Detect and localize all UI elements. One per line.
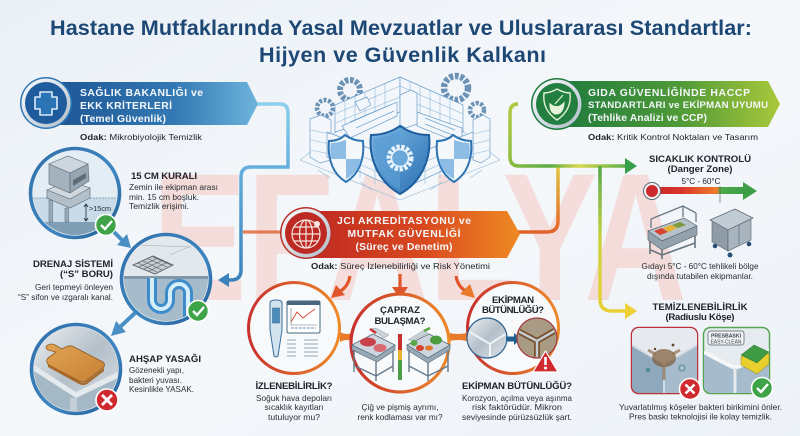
text: drain system: DRENAJ SİSTEMİ <box>33 259 113 270</box>
data table <box>287 340 318 356</box>
thermometer bar <box>644 182 757 203</box>
icon: medical cross <box>20 77 72 129</box>
banner: Sağlık Bakanlığı: SAĞLIK BAKANLIĞI ve <box>80 86 203 99</box>
banner: Sağlık Bakanlığı: EKK KRİTERLERİ <box>80 99 172 112</box>
heading: temperature control: (Danger Zone) <box>668 164 732 175</box>
banner: JCI: JCI AKREDİTASYONU ve <box>337 214 471 227</box>
text: 15 cm rule: min. 15 cm boşluk. <box>129 192 199 202</box>
text: traceability: Soğuk hava depoları <box>256 393 332 403</box>
main shield with gear <box>371 126 429 194</box>
oven on stand <box>47 156 90 222</box>
text: drain system: Geri tepmeyi önleyen <box>35 282 113 292</box>
right table with vegetables <box>407 328 450 381</box>
panel: clean rounded corner <box>704 328 772 398</box>
text: temperature control <box>642 261 759 281</box>
text: cleanability: Pres baskı teknolojisi ile kolay temizlik. <box>629 412 772 422</box>
text: equipment integrity: seviyesinde pürüzsüzlük şart. <box>462 412 572 422</box>
heading: cleanability: (Radiuslu Köşe) <box>666 312 734 323</box>
kitchen walls <box>335 77 400 132</box>
banner: Sağlık Bakanlığı: (Temel Güvenlik) <box>80 114 166 125</box>
text: temperature control: Gıdayı 5°C - 60°C tehlikeli bölge <box>642 261 759 271</box>
circle: equipment integrity <box>467 282 558 374</box>
text: cross contamination: Çiğ ve pişmiş ayrımı, <box>362 402 438 412</box>
connectors between circles <box>340 332 470 342</box>
connector: blue line from health ministry banner to drainage <box>218 104 288 287</box>
heading: cleanability: TEMİZLENEBİLİRLİK <box>652 302 748 313</box>
arrow to corroded corner <box>506 333 521 345</box>
text: 15 cm rule: 15 CM KURALI <box>131 171 197 182</box>
text: temperature control: dışında tutabilen ekipmanlar. <box>647 271 753 281</box>
smooth steel corner <box>467 318 507 358</box>
text: traceability: sıcaklık kayıtları <box>264 402 324 412</box>
text: drain system: “S” sifon ve ızgaralı kanal. <box>18 292 113 302</box>
brick walls <box>310 115 331 163</box>
text: 15 cm rule <box>129 171 218 211</box>
connector: yellow line to cleanability <box>600 166 637 319</box>
text: equipment integrity: Korozyon, açılma veya aşınma <box>462 393 572 403</box>
focus text: process traceability: Odak: Süreç İzlenebilirliği ve Risk Yönetimi <box>311 261 490 271</box>
text: drain system <box>18 259 113 302</box>
corroded corner <box>517 318 557 358</box>
banner: HACCP: (Tehlike Analizi ve CCP) <box>588 113 707 124</box>
side shield right <box>437 135 471 182</box>
connector: green line to temperature control <box>510 104 637 174</box>
connector: orange line from JCI banner <box>243 166 558 232</box>
heading: temperature control: SICAKLIK KONTROLÜ <box>649 154 751 165</box>
circle: cross contamination: ÇAPRAZ <box>380 305 420 316</box>
text: wood ban: Gözenekli yapı, <box>129 365 184 375</box>
cutting board <box>46 344 104 385</box>
blueprint floor <box>300 125 500 200</box>
arrow: drain to wood ban <box>111 313 135 336</box>
text: drain system: (“S” BORU) <box>60 269 113 280</box>
side shield left <box>329 135 363 182</box>
gears <box>317 76 484 117</box>
text: equipment integrity <box>462 380 572 422</box>
circle: 15 cm rule <box>30 148 120 242</box>
thermometer <box>270 300 282 357</box>
heading: temperature control <box>649 154 751 186</box>
colour coded divider <box>398 334 402 380</box>
banner: HACCP: STANDARTLARI ve EKİPMAN UYUMU <box>588 100 768 111</box>
label: presbaski easy-clean: PRESBASKI <box>711 334 741 340</box>
cross badge <box>96 389 118 411</box>
circle: equipment integrity: EKİPMAN <box>492 295 534 306</box>
dimension arrow <box>84 204 88 221</box>
text: equipment integrity: EKİPMAN BÜTÜNLÜĞÜ? <box>462 380 572 392</box>
title <box>50 15 752 67</box>
text: wood ban: AHŞAP YASAĞI <box>129 353 201 365</box>
text: cross contamination: renk kodlaması var mı? <box>358 412 443 422</box>
text: equipment integrity: risk faktörüdür. Mikron <box>472 402 562 412</box>
circle: equipment integrity: BÜTÜNLÜĞÜ? <box>482 304 544 316</box>
icon: globe <box>280 207 332 259</box>
banner: HACCP: GIDA GÜVENLİĞİNDE HACCP <box>588 86 750 99</box>
heading: temperature control: 5°C - 60°C <box>682 176 720 186</box>
circle: 15 cm rule: >15cm <box>89 204 111 213</box>
text: traceability <box>256 381 333 422</box>
panel: dirty sharp corner <box>632 328 700 400</box>
banner: Sağlık Bakanlığı <box>20 77 258 129</box>
icon: shield with mortar <box>531 78 583 130</box>
text: wood ban <box>129 353 201 394</box>
circle: cross contamination: BULAŞMA? <box>374 316 426 327</box>
check badge <box>96 214 116 236</box>
sponge <box>741 345 769 374</box>
warning triangle <box>533 351 558 372</box>
text: 15 cm rule: Zemin ile ekipman arası <box>129 182 218 192</box>
banner: JCI: MUTFAK GÜVENLİĞİ <box>348 227 461 240</box>
title: Hijyen ve Güvenlik Kalkanı <box>259 42 546 67</box>
text: cross contamination <box>358 402 443 422</box>
circle: traceability <box>248 282 340 374</box>
text: cleanability <box>619 402 782 422</box>
floor grate <box>133 256 173 274</box>
monitor chart <box>287 301 320 333</box>
icon: bain-marie <box>648 206 697 259</box>
banner: JCI <box>280 207 520 259</box>
left table with raw meat <box>352 328 395 381</box>
text: 15 cm rule: Temizlik erişimi. <box>129 201 189 211</box>
banner: JCI: (Süreç ve Denetim) <box>356 242 452 253</box>
banner: HACCP <box>531 78 780 130</box>
focus text: Mikrobiyolojik Temizlik: Odak: Mikrobiyolojik Temizlik <box>80 132 203 142</box>
focus text: critical control points: Odak: Kritik Kontrol Noktaları ve Tasarım <box>588 132 758 142</box>
text: cleanability: Yuvarlatılmış köşeler bakteri birikimini önler. <box>619 402 782 412</box>
central kitchen illustration with shields <box>300 76 500 200</box>
title: Hastane Mutfaklarında Yasal Mevzuatlar ve Uluslararası Standartlar: <box>50 15 752 40</box>
check badge <box>188 300 208 322</box>
circle: cross contamination <box>351 294 450 392</box>
text: traceability: İZLENEBİLİRLİK? <box>256 381 333 392</box>
circle: drain system <box>120 234 212 330</box>
heading: cleanability <box>652 302 748 323</box>
circle: wood ban <box>30 324 122 420</box>
S-shaped pipe <box>152 278 188 330</box>
arrow: rule to drain <box>114 232 131 248</box>
kitchen counters and hood <box>342 102 397 138</box>
icon: holding cart <box>710 209 753 258</box>
label: presbaski easy-clean: EASY-CLEAN <box>710 340 742 346</box>
text: wood ban: bakteri yuvası. <box>129 375 182 385</box>
fridge <box>400 90 417 128</box>
arrows from JCI to three circles <box>331 274 475 299</box>
text: traceability: tutuluyor mu? <box>268 412 320 422</box>
text: wood ban: Kesinlikle YASAK. <box>129 384 194 394</box>
label: presbaski easy-clean <box>708 331 744 346</box>
